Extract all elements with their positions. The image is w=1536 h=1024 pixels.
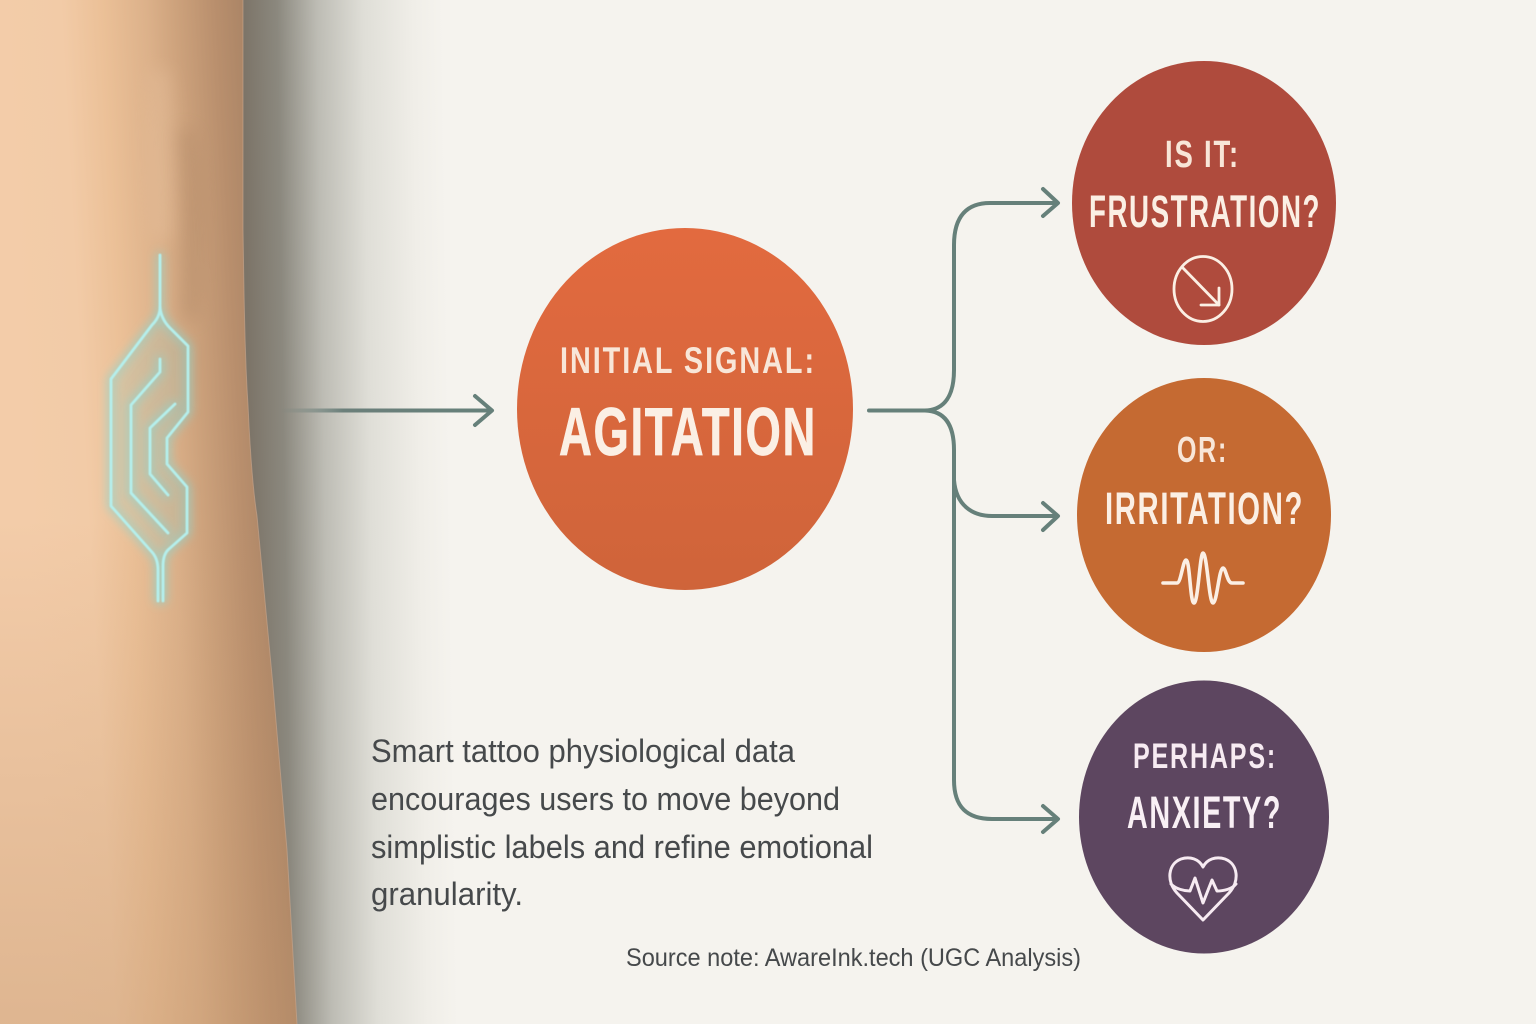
arm shadow: [200, 0, 500, 1024]
body text: granularity.: [371, 876, 523, 912]
body text: simplistic labels and refine emotional: [371, 829, 873, 865]
body text: [371, 733, 873, 912]
lower arm tone: [0, 520, 297, 1024]
skin crease highlight: [147, 70, 175, 240]
circle: initial signal agitation: [517, 228, 853, 590]
label: or: OR:: [1177, 429, 1228, 470]
forearm: [0, 0, 297, 1024]
tattoo glow: [111, 255, 188, 601]
label: frustration: FRUSTRATION?: [1089, 186, 1321, 237]
label: initial signal: INITIAL SIGNAL:: [560, 340, 816, 381]
circle: frustration: [1072, 61, 1336, 345]
tattoo inner haze: [111, 315, 188, 560]
label: agitation: AGITATION: [559, 394, 817, 470]
circle: anxiety: [1079, 680, 1329, 954]
smart tattoo: [111, 255, 188, 601]
skin crease shadow: [178, 130, 199, 320]
circle: irritation: [1077, 378, 1331, 652]
branching arrows: [869, 189, 1058, 832]
label: irritation: IRRITATION?: [1105, 483, 1304, 534]
arm edge highlight: [243, 0, 297, 1024]
label: perhaps: PERHAPS:: [1133, 737, 1277, 776]
body text: encourages users to move beyond: [371, 781, 840, 817]
body text: Smart tattoo physiological data: [371, 733, 795, 769]
icon: pulse wave: [1163, 553, 1243, 603]
label: anxiety: ANXIETY?: [1127, 787, 1282, 838]
icon: heart with pulse: [1170, 858, 1236, 920]
icon: blocked arrow: [1174, 256, 1232, 322]
tattoo lines: [111, 255, 188, 601]
label: is it: IS IT:: [1165, 134, 1240, 176]
source note: Source note: AwareInk.tech (UGC Analysis): [626, 944, 1081, 972]
arrow: arm to initial signal: [280, 396, 492, 425]
